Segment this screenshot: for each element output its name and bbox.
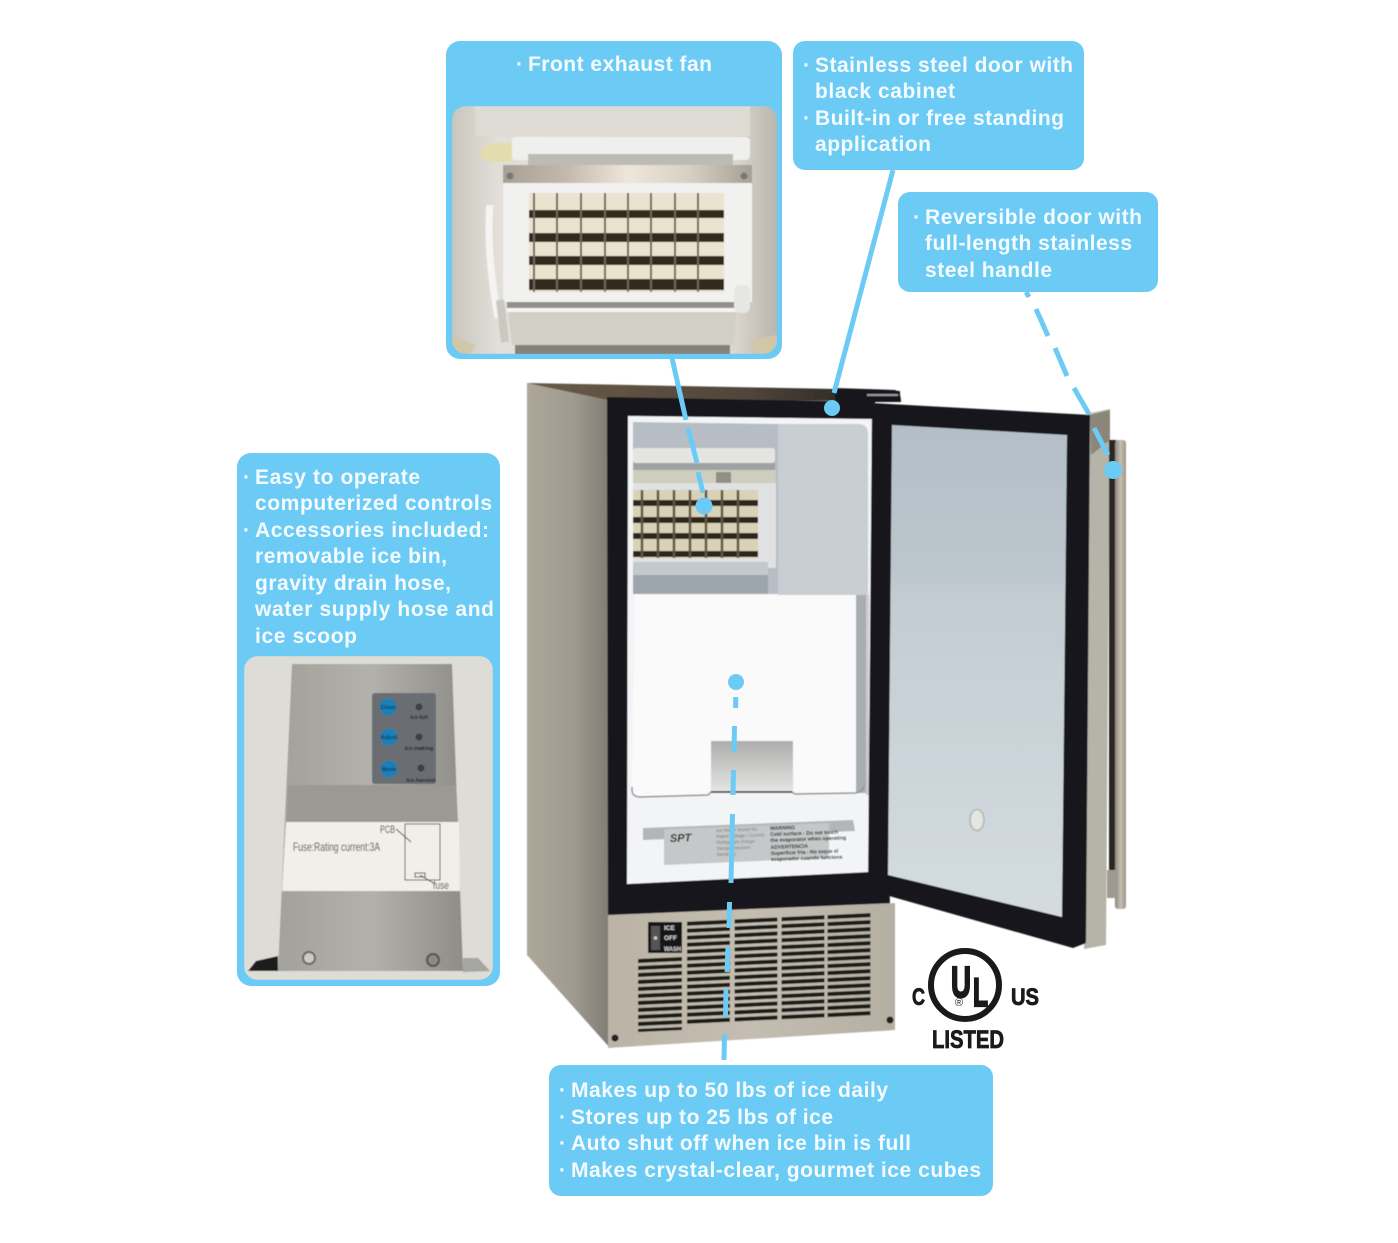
- door stainless side: [1084, 409, 1110, 949]
- control button panel: Adjust: [380, 735, 398, 741]
- callout text: ice production: [559, 1079, 981, 1182]
- black front frame: [607, 397, 890, 920]
- fuse label: Fuse:Rating current:3A: [293, 840, 380, 854]
- callout text: door and installation: ·: [803, 54, 810, 77]
- ice off wash switch: OFF: [664, 935, 677, 942]
- specification label: Refrigerant charge: [716, 839, 755, 845]
- ice off wash switch: ICE: [664, 925, 676, 932]
- callout text: ice production: Makes crystal-clear, gourmet ice cubes: [571, 1159, 981, 1182]
- control button panel: Clean: [381, 705, 396, 711]
- leader line: front exhaust fan: [672, 358, 712, 514]
- control button panel: Ice-harvest: [406, 778, 436, 784]
- UL listed mark: LISTED: [932, 1026, 1004, 1054]
- interior side wall: [778, 424, 868, 600]
- callout text: reversible door: full-length stainless: [925, 232, 1132, 255]
- interior back panel: [633, 422, 778, 594]
- leader line: stainless door: [824, 170, 893, 416]
- callout text: controls and accessories: Easy to operate: [255, 466, 420, 489]
- callout text: reversible door: ·: [913, 206, 920, 229]
- door handle: [1107, 440, 1126, 909]
- specification label: WARNING: [770, 825, 795, 832]
- callout text: controls and accessories: [243, 466, 494, 648]
- fuse label: [282, 822, 460, 892]
- control button panel: Mode: [382, 767, 396, 773]
- photo: control box: [244, 656, 493, 980]
- leader line: ice production: [724, 674, 744, 1060]
- panel: front exhaust fan: [446, 41, 782, 359]
- callout text: controls and accessories: ·: [243, 519, 250, 542]
- callout text: door and installation: ·: [803, 107, 810, 130]
- specification label: the evaporator when operating: [770, 835, 846, 844]
- machine side wall: [527, 383, 610, 1048]
- specification label: ADVERTENCIA: [771, 844, 808, 851]
- callout text: controls and accessories: ·: [243, 466, 250, 489]
- specification label: Superficie fria - No toque el: [771, 849, 839, 857]
- caption: front exhaust fan: Front exhaust fan: [528, 53, 712, 76]
- callout text: ice production: Auto shut off when ice bin is full: [571, 1132, 911, 1155]
- machine top edge: [527, 383, 900, 401]
- callout text: ice production: ·: [559, 1159, 566, 1182]
- door button: [970, 810, 984, 830]
- specification label: [643, 820, 855, 865]
- specification label: evaporador cuando funciona: [771, 854, 842, 863]
- control button panel: Ice-making: [405, 746, 433, 752]
- callout text: ice production: Makes up to 50 lbs of ice daily: [571, 1079, 888, 1102]
- callout text: reversible door: Reversible door with: [925, 206, 1142, 229]
- fuse label: fuse: [433, 880, 449, 892]
- callout text: reversible door: steel handle: [925, 259, 1052, 282]
- control button panel: [372, 693, 436, 784]
- UL listed mark: U: [951, 958, 971, 1007]
- callout text: door and installation: black cabinet: [815, 80, 955, 103]
- ice maker machine: [527, 383, 1126, 1048]
- panel: computerized controls: [237, 453, 500, 986]
- ice off wash switch: [648, 922, 682, 953]
- open door black gasket: [868, 403, 1090, 948]
- UL listed mark: [912, 951, 1039, 1054]
- callout text: door and installation: application: [815, 133, 931, 156]
- panel: stainless steel door: [793, 41, 1084, 170]
- callout text: controls and accessories: removable ice bin,: [255, 545, 447, 568]
- callout text: ice production: ·: [559, 1079, 566, 1102]
- interior ice maker unit: [633, 448, 776, 594]
- specification label: Design pressure: [717, 845, 751, 851]
- callout text: ice production: ·: [559, 1106, 566, 1129]
- UL listed mark: US: [1011, 984, 1039, 1011]
- UL listed mark: L: [973, 971, 988, 1015]
- callout text: controls and accessories: ice scoop: [255, 625, 357, 648]
- callout text: door and installation: Stainless steel door with: [815, 54, 1073, 77]
- callout text: controls and accessories: computerized controls: [255, 492, 492, 515]
- callout text: ice production: ·: [559, 1132, 566, 1155]
- photo: ice mould close-up: [452, 106, 777, 354]
- specification label: Cold surface - Do not touch: [770, 830, 838, 838]
- door inner liner: [888, 425, 1067, 917]
- callout text: ice production: Stores up to 25 lbs of ice: [571, 1106, 833, 1129]
- callout text: door and installation: [803, 54, 1073, 156]
- interior white surround: [627, 416, 872, 884]
- ice off wash switch: WASH: [664, 947, 681, 953]
- leader line: reversible door: [1026, 292, 1122, 479]
- specification label: Ice Maker Model No.: [716, 827, 758, 833]
- infographic canvas: [237, 41, 1158, 1196]
- panel: ice production: [549, 1065, 993, 1196]
- callout text: reversible door: [913, 206, 1142, 282]
- callout text: controls and accessories: water supply hose and: [254, 598, 494, 621]
- fuse label: PCB: [380, 824, 395, 836]
- specification label: Rated Voltage / Current: [716, 832, 765, 839]
- specification label: Serial No.: [717, 851, 737, 857]
- callout text: controls and accessories: gravity drain hose,: [255, 572, 451, 595]
- control button panel: Ice-full: [410, 715, 428, 721]
- callout text: controls and accessories: Accessories included:: [255, 519, 489, 542]
- panel: reversible door: [898, 192, 1158, 292]
- front grille panel: [608, 903, 895, 1048]
- specification label: SPT: [670, 832, 693, 845]
- removable ice bin: [632, 595, 869, 797]
- caption: front exhaust fan: ·: [516, 53, 523, 76]
- hinge cap: [835, 388, 901, 402]
- UL listed mark: C: [912, 984, 925, 1011]
- callout text: door and installation: Built-in or free standing: [815, 107, 1064, 130]
- UL listed mark: ®: [955, 997, 963, 1009]
